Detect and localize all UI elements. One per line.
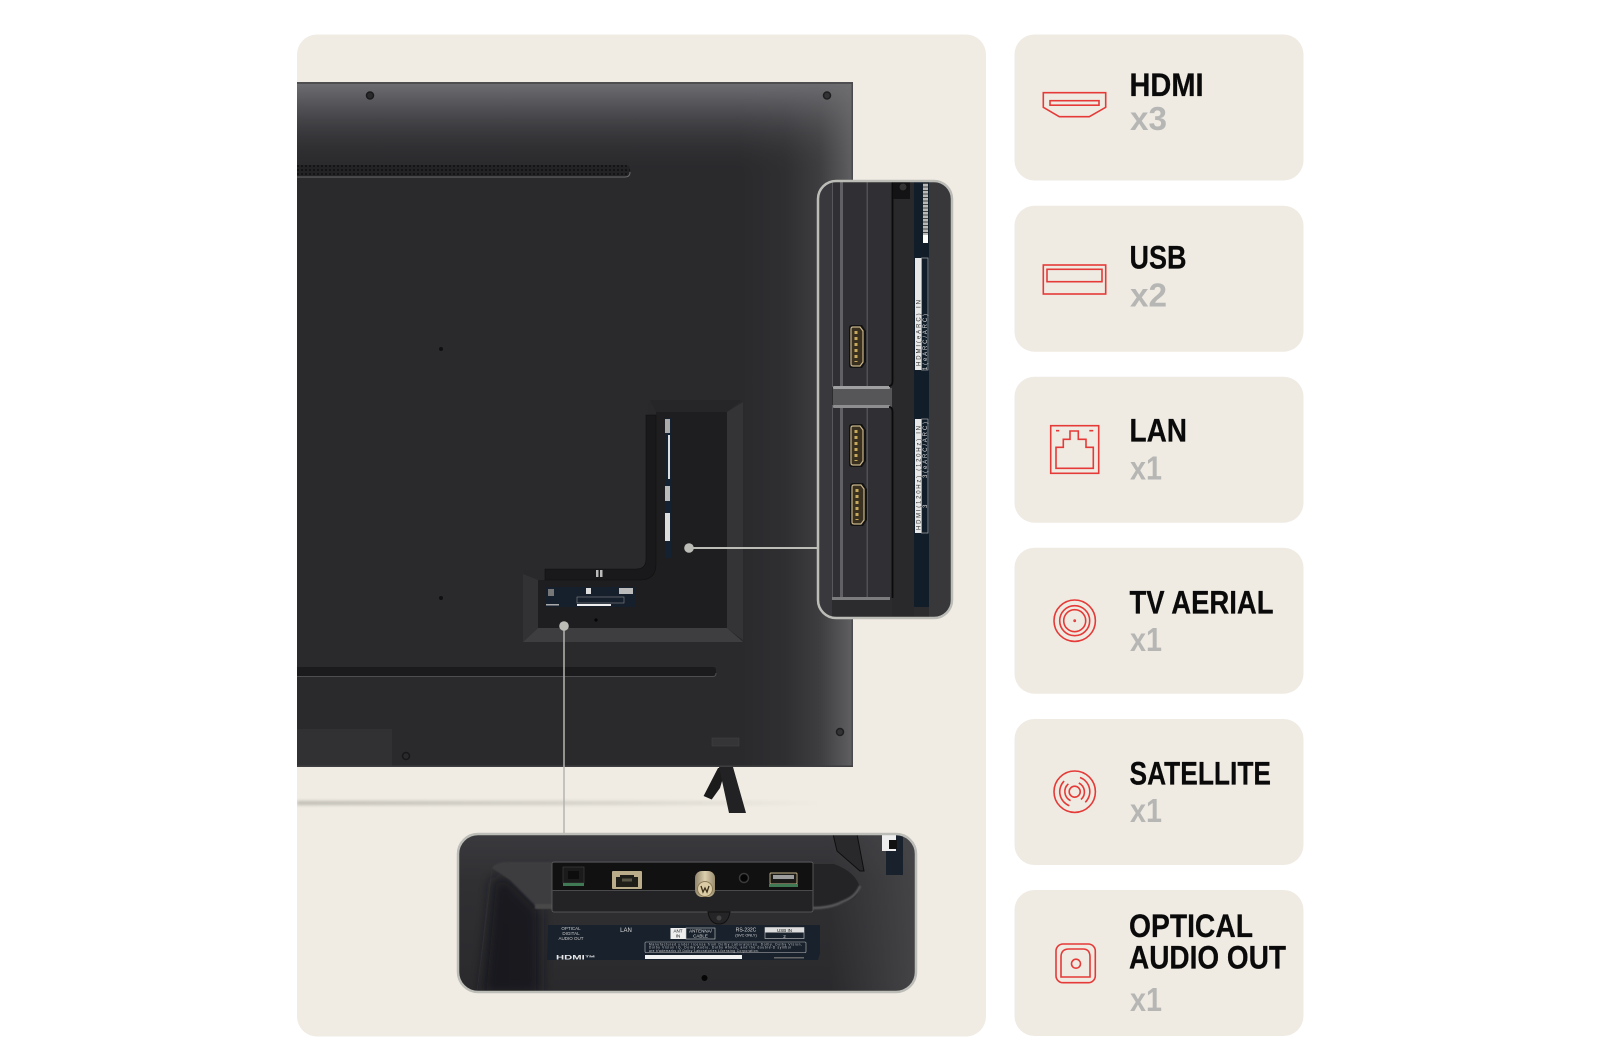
card: satellite	[1014, 719, 1304, 865]
HDMI label bottom: 3	[923, 504, 929, 508]
inset: rear ports	[458, 834, 916, 995]
port legend label: Dolby Vision IQ, Dolby Audio, Dolby Atmos, and the double-D symbol	[649, 946, 791, 950]
port legend label: IN	[676, 934, 680, 938]
HDMI label top: HDMI(eARC) IN	[916, 300, 922, 366]
icon: TV stand	[704, 767, 746, 813]
label: optical audio out: AUDIO OUT	[1129, 939, 1286, 975]
icon: LAN port	[612, 871, 642, 889]
label: optical audio out: OPTICAL	[1129, 908, 1253, 944]
count: optical audio out: x1	[1130, 981, 1162, 1018]
port legend label: USB IN	[777, 928, 792, 933]
icon: HDMI port 1	[849, 325, 866, 368]
count: TV aerial: x1	[1130, 621, 1162, 658]
icon: TV aerial	[1054, 600, 1095, 641]
label: satellite: SATELLITE	[1130, 756, 1271, 792]
icon: LAN	[1051, 426, 1099, 473]
card: TV aerial	[1014, 548, 1304, 694]
port legend label: Manufactured under license from Dolby Laboratories. Dolby, Dolby Vision,	[649, 942, 802, 946]
count: USB: x2	[1130, 277, 1167, 314]
TV back casing	[297, 82, 853, 767]
label: HDMI: HDMI	[1130, 67, 1204, 103]
port legend label: AUDIO OUT	[558, 936, 584, 941]
icon: USB port	[769, 873, 798, 887]
top vent	[297, 165, 630, 177]
icon: HDMI port 2	[849, 424, 866, 467]
card: HDMI	[1014, 34, 1304, 180]
lower slot	[297, 667, 716, 676]
side label fragment	[882, 834, 903, 875]
HDMI label top	[915, 258, 929, 370]
icon: coax connector	[695, 871, 715, 897]
HDMI label bottom: HDMI(120Hz) (120Hz) IN	[916, 426, 922, 530]
port bay	[523, 400, 743, 642]
port legend label: DIGITAL	[562, 931, 580, 936]
count: LAN: x1	[1130, 450, 1162, 486]
port legend label: are trademarks of Dolby Laboratories Licensing Corporation.	[649, 949, 759, 953]
card: optical audio out	[1014, 890, 1304, 1036]
floor shadow	[297, 801, 827, 805]
port legend label: LAN	[620, 928, 632, 934]
leader line: rear ports	[559, 621, 569, 833]
port legend label: ANT	[674, 928, 683, 934]
port legend label: CABLE	[693, 934, 708, 938]
label: LAN: LAN	[1130, 413, 1187, 449]
recess shading	[482, 877, 540, 995]
icon: satellite	[1054, 771, 1095, 812]
port legend label: OPTICAL	[561, 926, 581, 931]
port plate	[552, 862, 813, 924]
leader line: HDMI ports	[684, 543, 818, 553]
port legend label	[547, 925, 820, 962]
port legend label: HDMI™	[556, 954, 596, 962]
panel: TV rear view	[297, 34, 986, 1036]
port legend label: (SVC ONLY)	[735, 934, 757, 938]
count: HDMI: x3	[1130, 100, 1167, 137]
icon: HDMI port 3	[850, 483, 867, 526]
HDMI label top: 1(eARC/ARC)	[923, 314, 929, 370]
icon: HDMI	[1043, 93, 1106, 117]
count: satellite: x1	[1130, 792, 1162, 829]
barcode label	[923, 183, 928, 243]
HDMI label bottom	[915, 419, 929, 533]
icon: RS-232C jack	[740, 874, 748, 882]
label: optical audio out	[1129, 908, 1286, 975]
port legend label: RS-232C	[736, 928, 757, 934]
port legend label: ANTENNA/	[689, 928, 713, 934]
inset: HDMI ports	[818, 181, 952, 618]
label: USB: USB	[1130, 240, 1186, 276]
icon: optical port	[563, 867, 584, 886]
port legend label: 2	[783, 934, 786, 939]
HDMI label bottom: 3(eARC/ARC)	[923, 422, 929, 478]
label: TV aerial: TV AERIAL	[1130, 584, 1274, 620]
icon: optical audio	[1056, 944, 1095, 983]
card: USB	[1014, 206, 1304, 352]
icon: USB	[1043, 265, 1106, 294]
card: LAN	[1014, 377, 1304, 523]
screws	[366, 92, 844, 760]
